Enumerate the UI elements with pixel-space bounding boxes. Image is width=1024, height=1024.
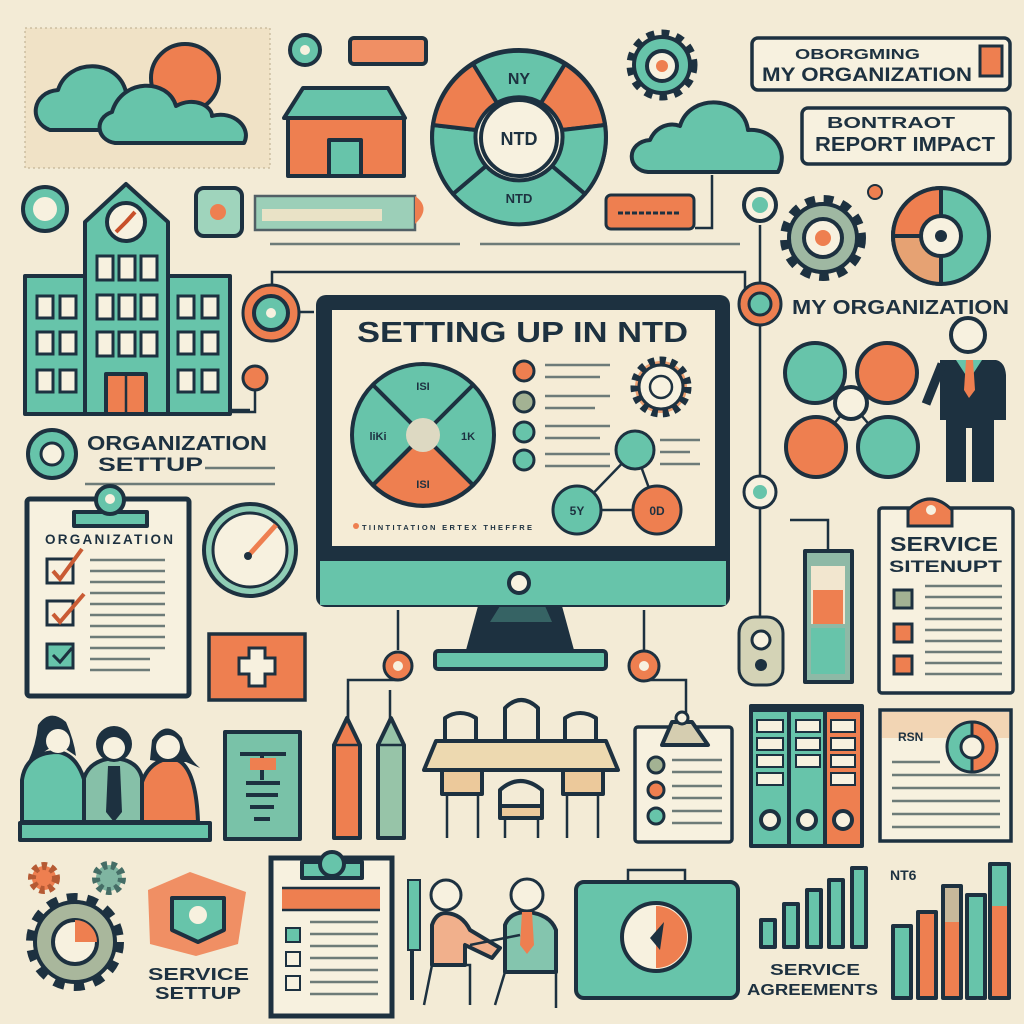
panel: progress bar row (196, 188, 740, 244)
panel: service setup clipboard (879, 499, 1013, 693)
callout: my organization: MY ORGANIZATION (762, 65, 972, 86)
nodes below monitor (384, 651, 659, 681)
chart: service agreements bars: AGREEMENTS (747, 982, 878, 999)
checklist (47, 549, 165, 670)
label: service setup with badge: SERVICE (148, 964, 249, 984)
chart: pie on screen: ISI (416, 381, 430, 393)
label: my organization: MY ORGANIZATION (792, 296, 1009, 319)
callout: report impact (802, 108, 1010, 164)
monitor stand (435, 606, 606, 669)
label: organization setup (28, 430, 275, 484)
icon: medical card (209, 634, 305, 700)
icon: clock (204, 504, 296, 596)
callout: report impact: REPORT IMPACT (815, 134, 995, 156)
icon: person in suit (926, 318, 1006, 482)
icon: gear top (633, 36, 691, 94)
monitor body (316, 295, 730, 607)
chart: pie on screen: ISI (416, 479, 430, 491)
label: organization setup: ORGANIZATION (87, 433, 267, 455)
icon: small badge top (290, 35, 426, 65)
icon: round badge left (23, 187, 67, 231)
icon: handshake meeting (408, 879, 556, 1008)
icon: binders (751, 706, 862, 846)
callout: my organization: OBORGMING (795, 46, 920, 63)
chart: donut right (893, 188, 989, 284)
chart: network on screen: 0D (649, 504, 665, 518)
label pill (606, 195, 694, 229)
icon: pencils (334, 690, 404, 838)
chart: service agreements bars: SERVICE (770, 962, 860, 979)
connector lines (24, 175, 760, 725)
label: service setup with badge (148, 872, 249, 1003)
chart: pie on screen: liKi (369, 431, 387, 443)
panel: small checklist clipboard (635, 712, 732, 842)
icon: tablet document (225, 732, 300, 839)
panel: organization clipboard (27, 486, 189, 696)
chart: NTD bars (890, 864, 1009, 998)
label: service setup with badge: SETTUP (155, 983, 241, 1003)
chart: service agreements bars (747, 868, 878, 999)
icon: node right (739, 283, 781, 325)
monitor screen (332, 310, 715, 546)
panel: report clipboard bottom (271, 852, 392, 1016)
icon: large gear (33, 900, 117, 984)
chart: NTD wheel (432, 50, 606, 224)
icon: camera case (576, 870, 738, 998)
heading: setting up in NTD: SETTING UP IN NTD (357, 317, 688, 349)
panel: report with donut (880, 710, 1011, 841)
icon: gear right (787, 185, 882, 274)
icon: node top (744, 189, 776, 221)
monitor (316, 295, 730, 669)
node right middle (744, 476, 776, 508)
icon: meeting table (424, 700, 618, 838)
diagram: four circles (785, 343, 918, 477)
icon: three people (20, 716, 210, 840)
chart: network on screen (553, 431, 700, 534)
callout: report impact: BONTRAOT (827, 115, 955, 132)
icon: school building (25, 184, 230, 414)
icon: gear on screen (635, 361, 687, 413)
panel: report with donut: RSN (898, 730, 923, 744)
callout: my organization (752, 38, 1010, 90)
icons: small gears (32, 865, 122, 891)
chart: NTD wheel: NTD (500, 129, 538, 149)
chart: NTD wheel: NY (508, 71, 530, 88)
panel: service setup clipboard: SERVICE (890, 534, 998, 556)
chart: NTD bars: NT6 (890, 867, 917, 883)
chart: pie on screen: 1K (461, 431, 475, 443)
list on screen (514, 361, 610, 470)
caption on screen: TIINTITATION ERTEX THEFFRE (362, 523, 532, 532)
chart: pie on screen (352, 364, 494, 506)
panel: organization clipboard: ORGANIZATION (45, 532, 173, 547)
icon: battery device (790, 520, 852, 682)
panel: clouds and sun (25, 28, 270, 168)
icon: device node (739, 617, 783, 685)
icon: house (284, 88, 405, 176)
label: organization setup: SETTUP (98, 455, 203, 476)
icon: orange ring node (243, 285, 299, 390)
chart: NTD wheel: NTD (506, 191, 532, 206)
icon: cloud (632, 102, 782, 172)
panel: service setup clipboard: SITENUPT (889, 557, 1003, 576)
chart: network on screen: 5Y (570, 504, 584, 518)
